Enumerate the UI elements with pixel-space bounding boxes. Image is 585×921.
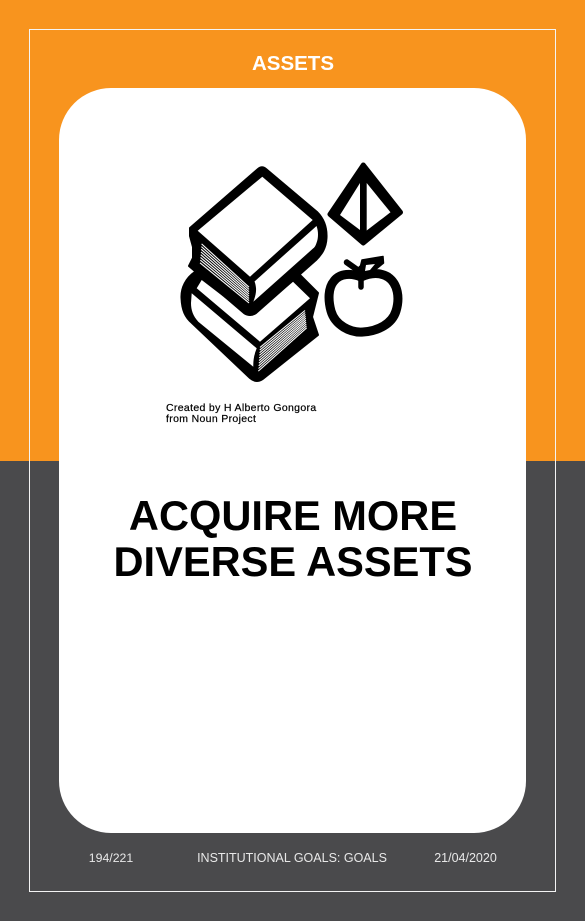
footer: date: 21/04/2020: [434, 851, 497, 865]
icon: apple: [329, 256, 398, 332]
footer: page number: 194/221: [89, 851, 133, 865]
orange top background: [0, 0, 585, 461]
main title: DIVERSE ASSETS: [113, 538, 473, 584]
icon credit: [166, 402, 316, 425]
icon: lower book: [181, 272, 318, 381]
icon credit: from Noun Project: [166, 413, 256, 425]
footer: section name: INSTITUTIONAL GOALS: GOALS: [197, 851, 387, 865]
icon credit: Created by H Alberto Gongora: [166, 402, 316, 414]
main title: [113, 492, 473, 584]
icon: pyramid: [330, 165, 400, 243]
heading: category: ASSETS: [252, 52, 334, 75]
main title: ACQUIRE MORE: [129, 492, 457, 538]
dark bottom background: [0, 461, 585, 921]
icon: upper book: [189, 167, 327, 315]
white card: [59, 88, 526, 833]
